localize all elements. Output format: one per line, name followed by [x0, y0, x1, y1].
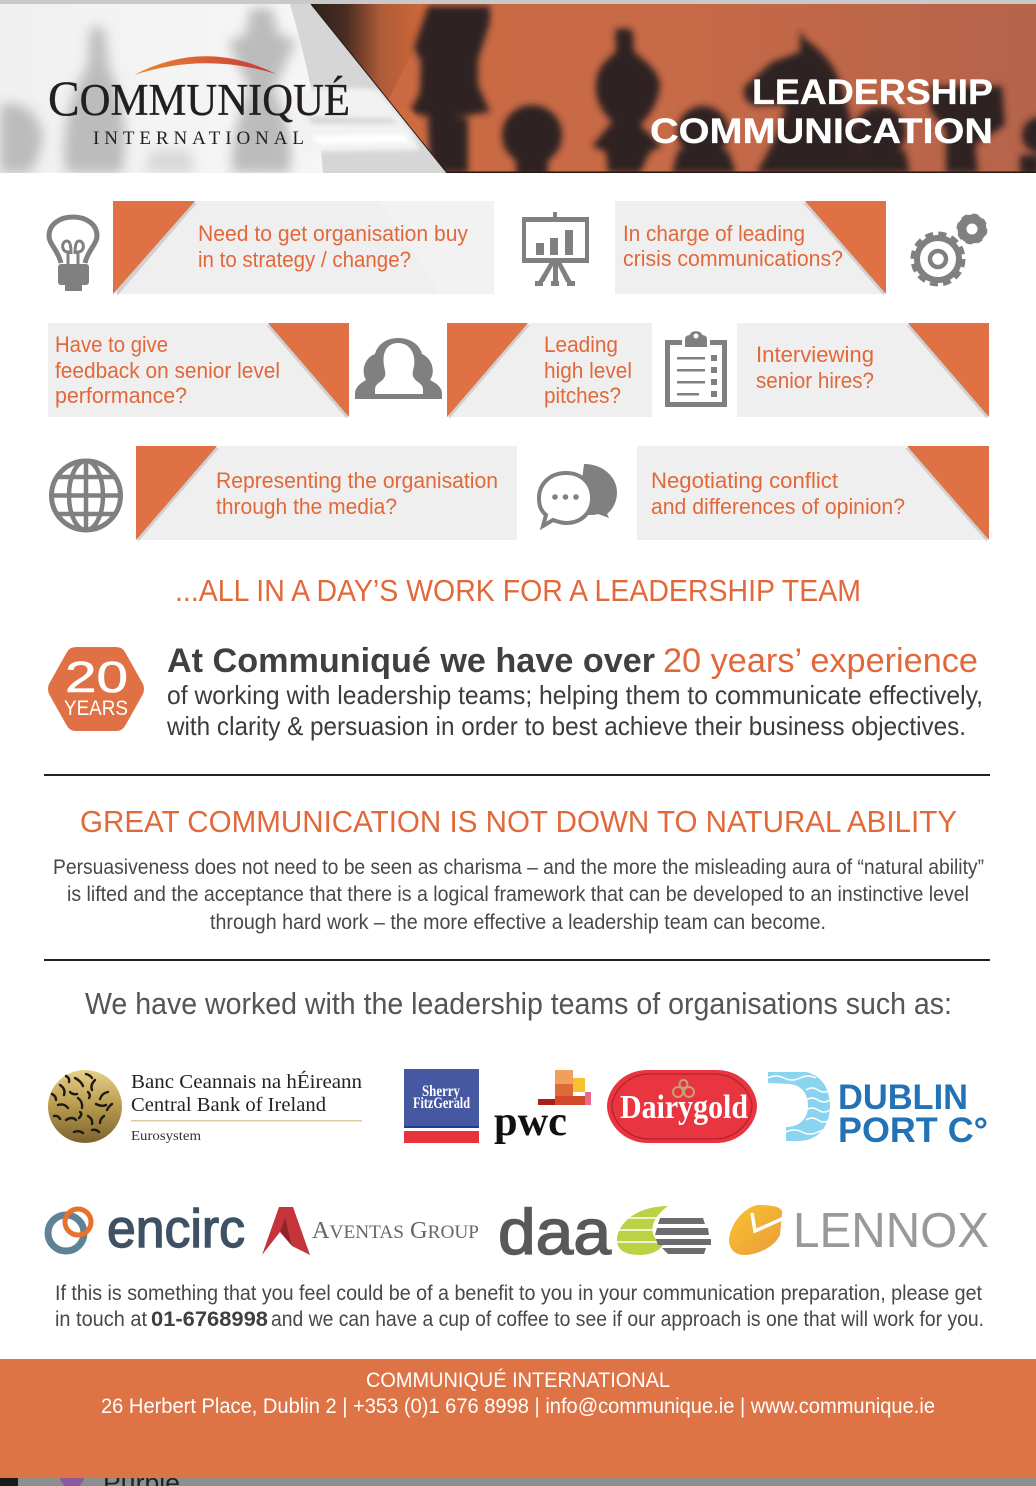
panel: negotiating conflict: Negotiating conflict — [651, 468, 838, 493]
panel: representing the organisation — [136, 446, 517, 542]
logo: PwC — [494, 1070, 591, 1145]
logo: Dublin Port: PORT C° — [838, 1111, 988, 1150]
panel: crisis communications: crisis communications? — [623, 246, 843, 271]
panel: negotiating conflict — [637, 446, 989, 542]
icon: globe — [52, 461, 120, 530]
title: COMMUNICATION — [650, 112, 993, 151]
logo: Central Bank of Ireland: Banc Ceannais na hÉireann — [131, 1070, 362, 1093]
logo: Dublin Port — [768, 1072, 988, 1150]
panel: high level pitches: Leading — [544, 332, 618, 357]
call to action: 01-6768998 — [151, 1308, 268, 1331]
logo: PwC: pwc — [494, 1099, 567, 1145]
logo — [48, 56, 350, 149]
heading: clients: We have worked with the leadership teams of organisations such as: — [85, 986, 952, 1021]
logo: Dublin Port: DUBLIN — [838, 1078, 968, 1117]
diagonal divider — [311, 4, 447, 173]
experience statement: At Communiqué we have over — [167, 642, 655, 680]
paragraph: persuasiveness — [53, 856, 984, 934]
panel: organisation buy in — [113, 201, 494, 296]
logo: Lennox: LENNOX — [793, 1204, 989, 1258]
badge: 20 years: 20 — [65, 653, 128, 702]
badge: 20 years — [48, 647, 144, 731]
footer band: 26 Herbert Place, Dublin 2 | +353 (0)1 676 8998 | info@communique.ie | www.communique.ie — [101, 1395, 935, 1418]
icon: presentation easel — [522, 212, 589, 286]
logo: Aventas Group: AVENTAS GROUP — [312, 1218, 479, 1244]
panel: interviewing senior hires — [737, 323, 989, 419]
panel: interviewing senior hires: senior hires? — [756, 368, 874, 393]
logo: Central Bank of Ireland: Eurosystem — [131, 1128, 202, 1143]
panel: representing the organisation: Representing the organisation — [216, 468, 498, 493]
logo arc — [134, 56, 276, 75]
paragraph: persuasiveness: Persuasiveness does not need to be seen as charisma – and the more the misleading aura of “natural ability” — [53, 856, 984, 879]
title: LEADERSHIP — [752, 73, 993, 112]
call to action — [55, 1282, 984, 1331]
experience statement: of working with leadership teams; helping them to communicate effectively, — [167, 680, 983, 710]
left monochrome chess photograph — [0, 4, 450, 173]
logo: daa: daa — [498, 1196, 611, 1268]
panel: organisation buy in: Need to get organisation buy — [198, 221, 468, 246]
right orange chess photograph — [300, 4, 1036, 176]
panel: crisis communications: In charge of leading — [623, 221, 805, 246]
icon: gears — [913, 216, 986, 284]
logo: daa — [498, 1196, 711, 1268]
logo: Sherry FitzGerald — [404, 1069, 479, 1143]
white chess piece foreground — [291, 88, 420, 152]
panel: high level pitches: pitches? — [544, 383, 621, 408]
top browser edge — [0, 0, 1036, 4]
footer band — [0, 1359, 1036, 1478]
logo: Dairygold — [607, 1070, 757, 1143]
panel: feedback on performance: feedback on senior level — [55, 358, 280, 383]
logo: Aventas Group — [262, 1207, 479, 1255]
logo: Dairygold: Dairygold — [620, 1089, 748, 1126]
paragraph: persuasiveness: through hard work – the more effective a leadership team can become. — [210, 911, 826, 934]
logo subtitle: INTERNATIONAL — [93, 128, 304, 149]
experience statement: 20 years’ experience — [663, 642, 978, 680]
panel: high level pitches — [447, 323, 652, 419]
logo: Encirc: encirc — [107, 1199, 245, 1259]
panel: interviewing senior hires: Interviewing — [756, 342, 874, 367]
panel: representing the organisation: through the media? — [216, 494, 397, 519]
call to action: If this is something that you feel could be of a benefit to you in your communication preparation, please get — [55, 1282, 982, 1305]
call to action: and we can have a cup of coffee to see if our approach is one that will work for you. — [271, 1308, 984, 1331]
icon: clipboard checklist — [665, 331, 727, 407]
logo wordmark: COMMUNIQUÉ — [48, 70, 350, 126]
logo: Central Bank of Ireland: Central Bank of Ireland — [131, 1094, 326, 1116]
heading: all in a day's work: ...ALL IN A DAY’S WORK FOR A LEADERSHIP TEAM — [175, 573, 861, 608]
icon: speech bubbles — [539, 464, 617, 526]
experience statement — [166, 642, 983, 741]
logo: Encirc — [48, 1199, 245, 1259]
badge: 20 years: YEARS — [64, 697, 128, 720]
icon: people silhouette — [355, 338, 442, 399]
call to action: in touch at — [55, 1308, 147, 1331]
panel: negotiating conflict: and differences of opinion? — [651, 494, 905, 519]
logo: Sherry FitzGerald: FitzGerald — [413, 1095, 470, 1112]
header banner — [0, 4, 1036, 176]
title — [651, 79, 992, 144]
panel: organisation buy in: in to strategy / change? — [198, 247, 411, 272]
logo: Sherry FitzGerald: Sherry — [422, 1083, 460, 1100]
panel: high level pitches: high level — [544, 358, 632, 383]
paragraph: persuasiveness: is lifted and the acceptance that there is a logical framework that can be developed to an instinctive level — [67, 883, 969, 906]
panel: feedback on performance: performance? — [55, 383, 187, 408]
experience statement: with clarity & persuasion in order to best achieve their business objectives. — [166, 711, 966, 741]
footer band: COMMUNIQUÉ INTERNATIONAL — [366, 1369, 670, 1392]
icon: light bulb — [49, 217, 97, 291]
panel: feedback on performance: Have to give — [55, 332, 168, 357]
heading: great communication: GREAT COMMUNICATION IS NOT DOWN TO NATURAL ABILITY — [80, 804, 957, 839]
logo: Central Bank of Ireland — [48, 1070, 362, 1143]
cropped underlying window — [0, 1464, 1036, 1486]
panel: feedback on performance — [48, 323, 349, 419]
panel: crisis communications — [615, 201, 886, 296]
